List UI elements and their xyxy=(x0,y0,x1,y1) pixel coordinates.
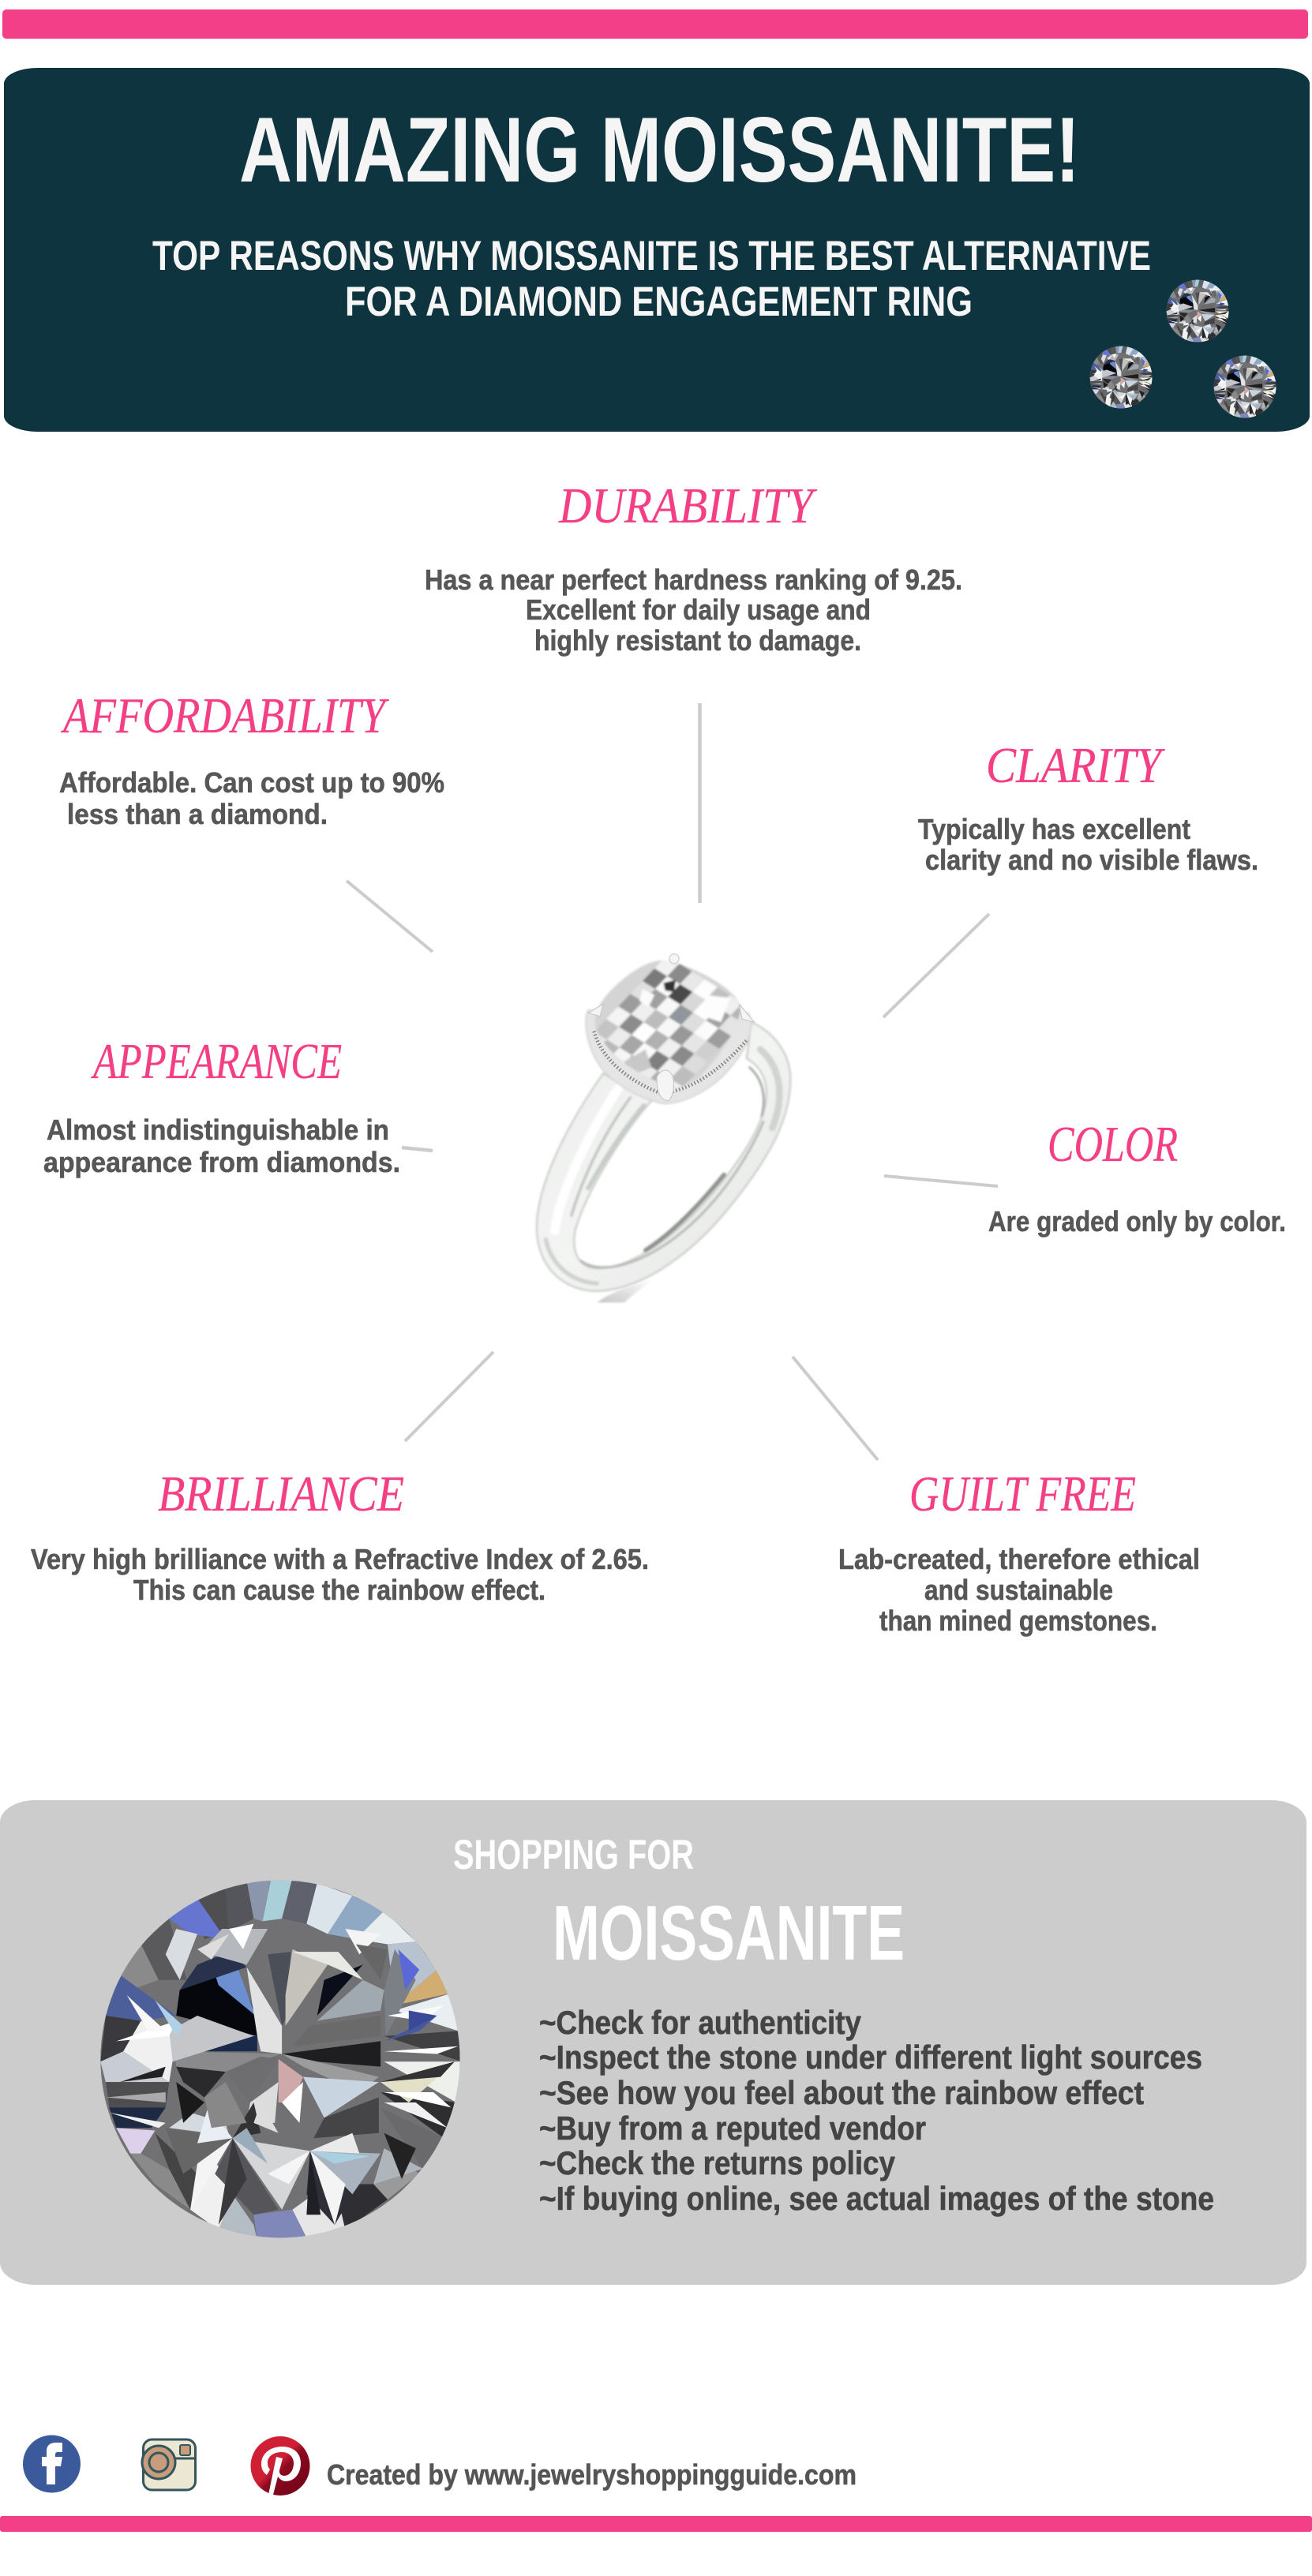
text: durability xyxy=(425,564,962,657)
block: brilliance xyxy=(31,1466,649,1606)
large diamond xyxy=(100,1878,462,2241)
shopping tips list: ~If buying online, see actual images of the stone xyxy=(539,2180,1214,2217)
block: color xyxy=(988,1116,1286,1237)
heading: brilliance: BRILLIANCE xyxy=(158,1466,404,1522)
text: affordability: less than a diamond. xyxy=(67,798,328,830)
ring band xyxy=(537,1010,790,1291)
connector: guilt free xyxy=(793,1357,878,1460)
shopping tips list: ~Check for authenticity xyxy=(539,2004,862,2041)
icon: three small diamonds xyxy=(1089,279,1276,418)
heading: shopping for: SHOPPING FOR xyxy=(453,1832,694,1878)
connector: brilliance xyxy=(405,1352,493,1441)
heading: clarity: CLARITY xyxy=(986,737,1166,793)
setting rim xyxy=(586,1010,751,1104)
text: appearance: Almost indistinguishable in xyxy=(47,1114,389,1146)
heading: guilt free: GUILT FREE xyxy=(909,1466,1136,1522)
text: guilt free xyxy=(838,1543,1200,1637)
block: affordability xyxy=(59,687,444,830)
text: appearance: appearance from diamonds. xyxy=(43,1146,400,1178)
block: durability xyxy=(425,477,962,657)
shopping tips list: ~Inspect the stone under different light sources xyxy=(539,2039,1202,2076)
connector: affordability xyxy=(347,881,433,952)
heading: affordability: AFFORDABILITY xyxy=(61,687,389,743)
ring image xyxy=(537,953,790,1302)
center stone xyxy=(595,960,742,1088)
text: appearance xyxy=(43,1114,400,1178)
text: affordability: Affordable. Can cost up to 90% xyxy=(59,766,444,799)
top pink bar xyxy=(2,9,1308,39)
text: brilliance: This can cause the rainbow effect. xyxy=(133,1574,545,1606)
heading: moissanite: MOISSANITE xyxy=(553,1889,905,1976)
block: guilt free xyxy=(838,1466,1200,1637)
text: clarity xyxy=(918,813,1258,876)
title: AMAZING MOISSANITE! xyxy=(239,98,1080,201)
text: durability: highly resistant to damage. xyxy=(534,624,861,657)
text: guilt free: than mined gemstones. xyxy=(879,1604,1157,1637)
subtitle xyxy=(152,233,1151,325)
heading: color: COLOR xyxy=(1048,1116,1178,1172)
connector: durability xyxy=(698,703,702,903)
subtitle: FOR A DIAMOND ENGAGEMENT RING xyxy=(345,279,973,325)
shopping tips list: ~Buy from a reputed vendor xyxy=(539,2110,926,2147)
beaded bezel xyxy=(594,1032,747,1093)
block: appearance xyxy=(43,1033,400,1178)
heading: appearance: APPEARANCE xyxy=(91,1033,342,1089)
text: affordability xyxy=(59,766,444,830)
icon: pinterest xyxy=(251,2436,309,2496)
block: clarity xyxy=(918,737,1258,876)
text: guilt free: Lab-created, therefore ethical xyxy=(838,1543,1200,1575)
bottom pink bar xyxy=(0,2516,1312,2532)
header panel xyxy=(4,68,1310,432)
band shading xyxy=(545,1050,779,1283)
text: brilliance: Very high brilliance with a Refractive Index of 2.65. xyxy=(31,1543,649,1575)
text: brilliance xyxy=(31,1543,649,1606)
text: guilt free: and sustainable xyxy=(924,1574,1113,1606)
shopping tips list: ~Check the returns policy xyxy=(539,2144,896,2181)
connector: appearance xyxy=(402,1148,433,1151)
shopping tips list xyxy=(539,2004,1214,2217)
icon: facebook xyxy=(23,2436,81,2492)
text: durability: Has a near perfect hardness ranking of 9.25. xyxy=(425,564,962,596)
icon: instagram xyxy=(142,2439,196,2490)
text: clarity: clarity and no visible flaws. xyxy=(925,844,1258,876)
text: durability: Excellent for daily usage and xyxy=(526,593,871,626)
shopping panel xyxy=(0,1800,1306,2285)
connector: color xyxy=(884,1176,998,1186)
prongs xyxy=(588,954,754,1101)
heading: durability: DURABILITY xyxy=(558,477,818,534)
text: clarity: Typically has excellent xyxy=(918,813,1190,845)
connector: clarity xyxy=(883,914,989,1017)
shopping tips list: ~See how you feel about the rainbow effect xyxy=(539,2074,1144,2111)
shadow under ring xyxy=(597,1279,654,1302)
credit line: Created by www.jewelryshoppingguide.com xyxy=(327,2458,857,2491)
